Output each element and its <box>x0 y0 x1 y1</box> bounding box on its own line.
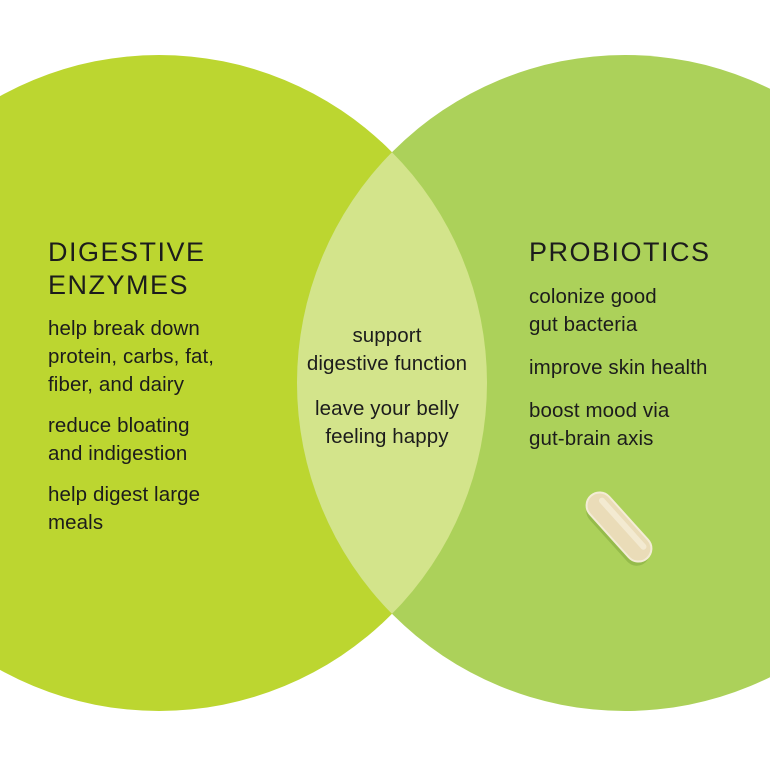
overlap lens <box>297 152 487 614</box>
text: probiotics benefits: gut-brain axis <box>529 427 653 450</box>
text: enzymes benefits: meals <box>48 511 103 534</box>
circle: probiotics <box>297 55 770 711</box>
text: probiotics benefits: colonize good <box>529 285 657 308</box>
text: probiotics benefits: gut bacteria <box>529 313 637 336</box>
text: enzymes benefits: protein, carbs, fat, <box>48 345 214 368</box>
heading: probiotics: PROBIOTICS <box>529 237 711 267</box>
icon: capsule <box>578 487 658 571</box>
text: shared benefits: feeling happy <box>325 425 449 448</box>
text: shared benefits: support <box>352 324 422 347</box>
text: enzymes benefits: fiber, and dairy <box>48 373 184 396</box>
text: enzymes benefits: help break down <box>48 317 200 340</box>
heading: digestive enzymes <box>48 237 206 300</box>
heading: digestive enzymes: ENZYMES <box>48 270 189 300</box>
text: enzymes benefits: reduce bloating <box>48 414 190 437</box>
text: shared benefits: digestive function <box>307 352 467 375</box>
text: probiotics benefits <box>529 285 708 450</box>
text: probiotics benefits: improve skin health <box>529 356 708 379</box>
text: probiotics benefits: boost mood via <box>529 399 669 422</box>
text: shared benefits: leave your belly <box>315 397 459 420</box>
text: shared benefits <box>307 324 467 448</box>
text: enzymes benefits: help digest large <box>48 483 200 506</box>
text: enzymes benefits <box>48 317 214 534</box>
circle: digestive enzymes <box>0 55 487 711</box>
text: enzymes benefits: and indigestion <box>48 442 187 465</box>
heading: digestive enzymes: DIGESTIVE <box>48 237 206 267</box>
